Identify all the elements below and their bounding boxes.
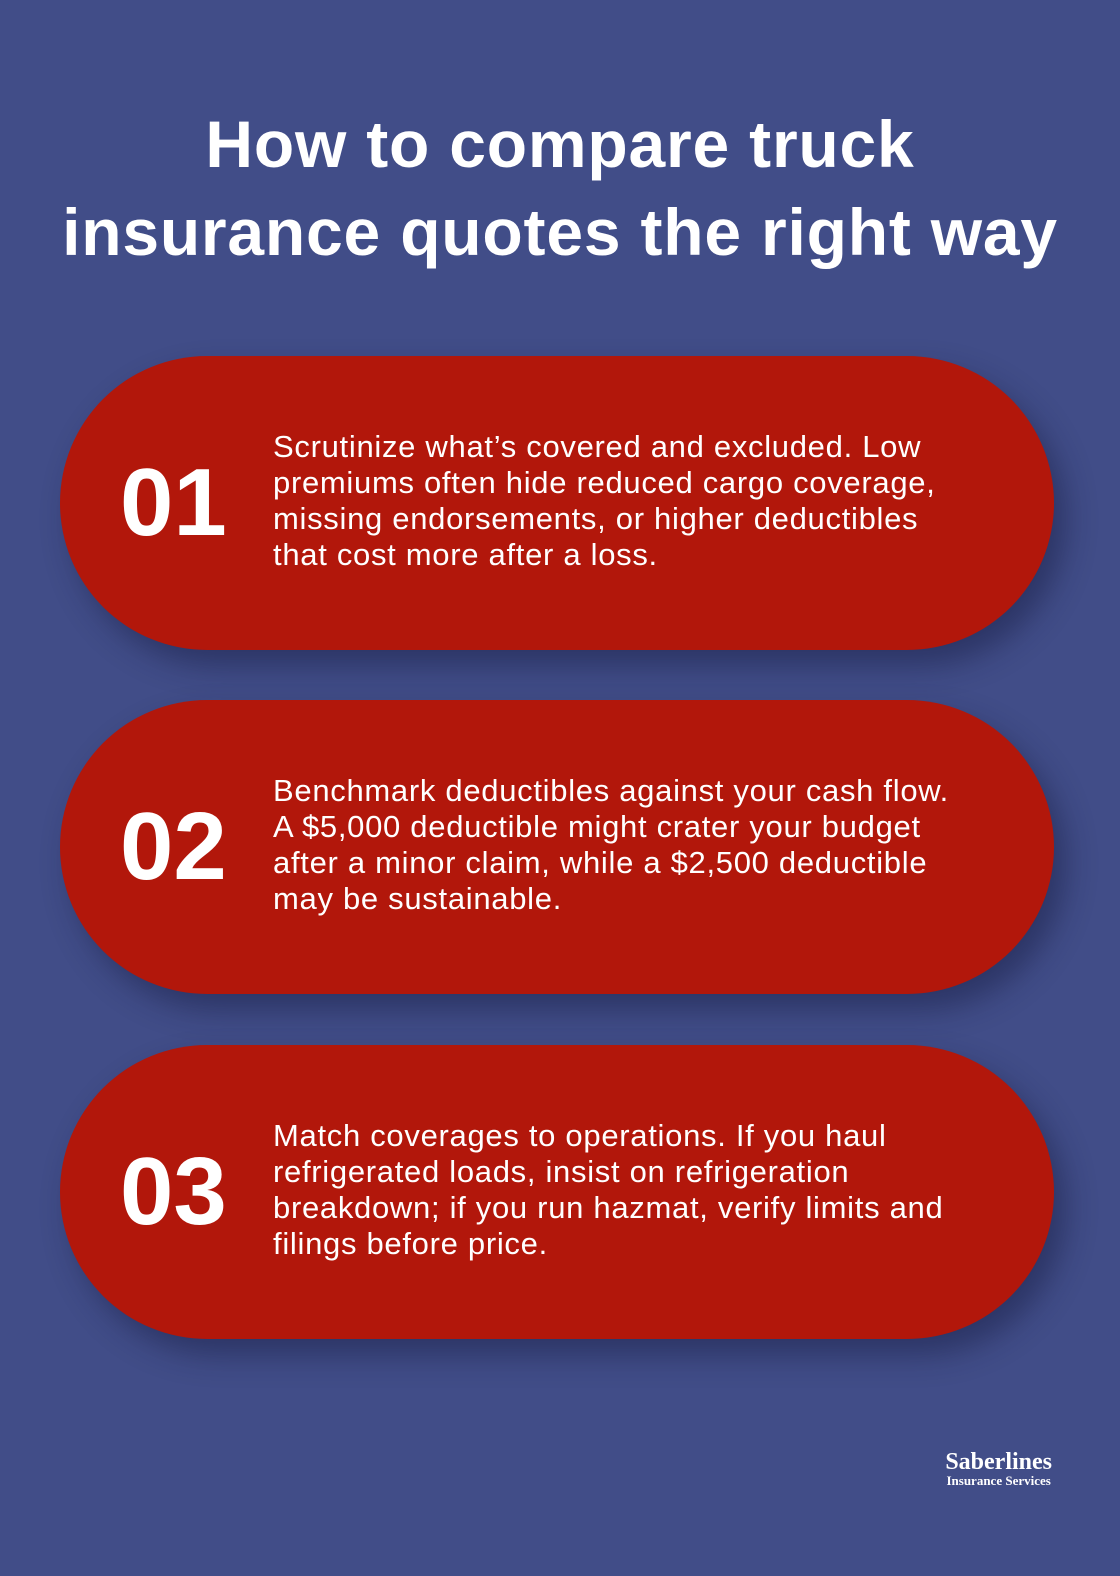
text: step 03: refrigerated loads, insist on refrigeration [273, 1154, 849, 1189]
logo: Insurance Services [946, 1473, 1051, 1488]
logo: Saberlines [945, 1449, 1052, 1475]
text: step 02 [273, 773, 949, 916]
text: step 03 [273, 1118, 943, 1261]
text: step 03: Match coverages to operations. If you haul [273, 1118, 887, 1153]
text: step 03: filings before price. [273, 1226, 548, 1261]
panel: step 03 [60, 1045, 1054, 1339]
title [62, 107, 1058, 269]
text: step 02: A $5,000 deductible might crater your budget [273, 809, 921, 844]
text: step 02: after a minor claim, while a $2,500 deductible [273, 845, 927, 880]
panel: step 01 [60, 356, 1054, 650]
text: step 02: Benchmark deductibles against your cash flow. [273, 773, 949, 808]
text: step 01 [273, 429, 936, 572]
text: step 03: breakdown; if you run hazmat, verify limits and [273, 1190, 943, 1225]
text: step 01: premiums often hide reduced cargo coverage, [273, 465, 936, 500]
title: How to compare truck [205, 107, 915, 181]
number 02: 02 [120, 793, 227, 900]
logo [945, 1449, 1052, 1488]
panel: step 02 [60, 700, 1054, 994]
number 01: 01 [120, 449, 227, 556]
text: step 02: may be sustainable. [273, 881, 562, 916]
text: step 01: Scrutinize what’s covered and excluded. Low [273, 429, 921, 464]
title: insurance quotes the right way [62, 195, 1058, 269]
number 03: 03 [120, 1138, 227, 1245]
text: step 01: that cost more after a loss. [273, 537, 658, 572]
text: step 01: missing endorsements, or higher deductibles [273, 501, 918, 536]
